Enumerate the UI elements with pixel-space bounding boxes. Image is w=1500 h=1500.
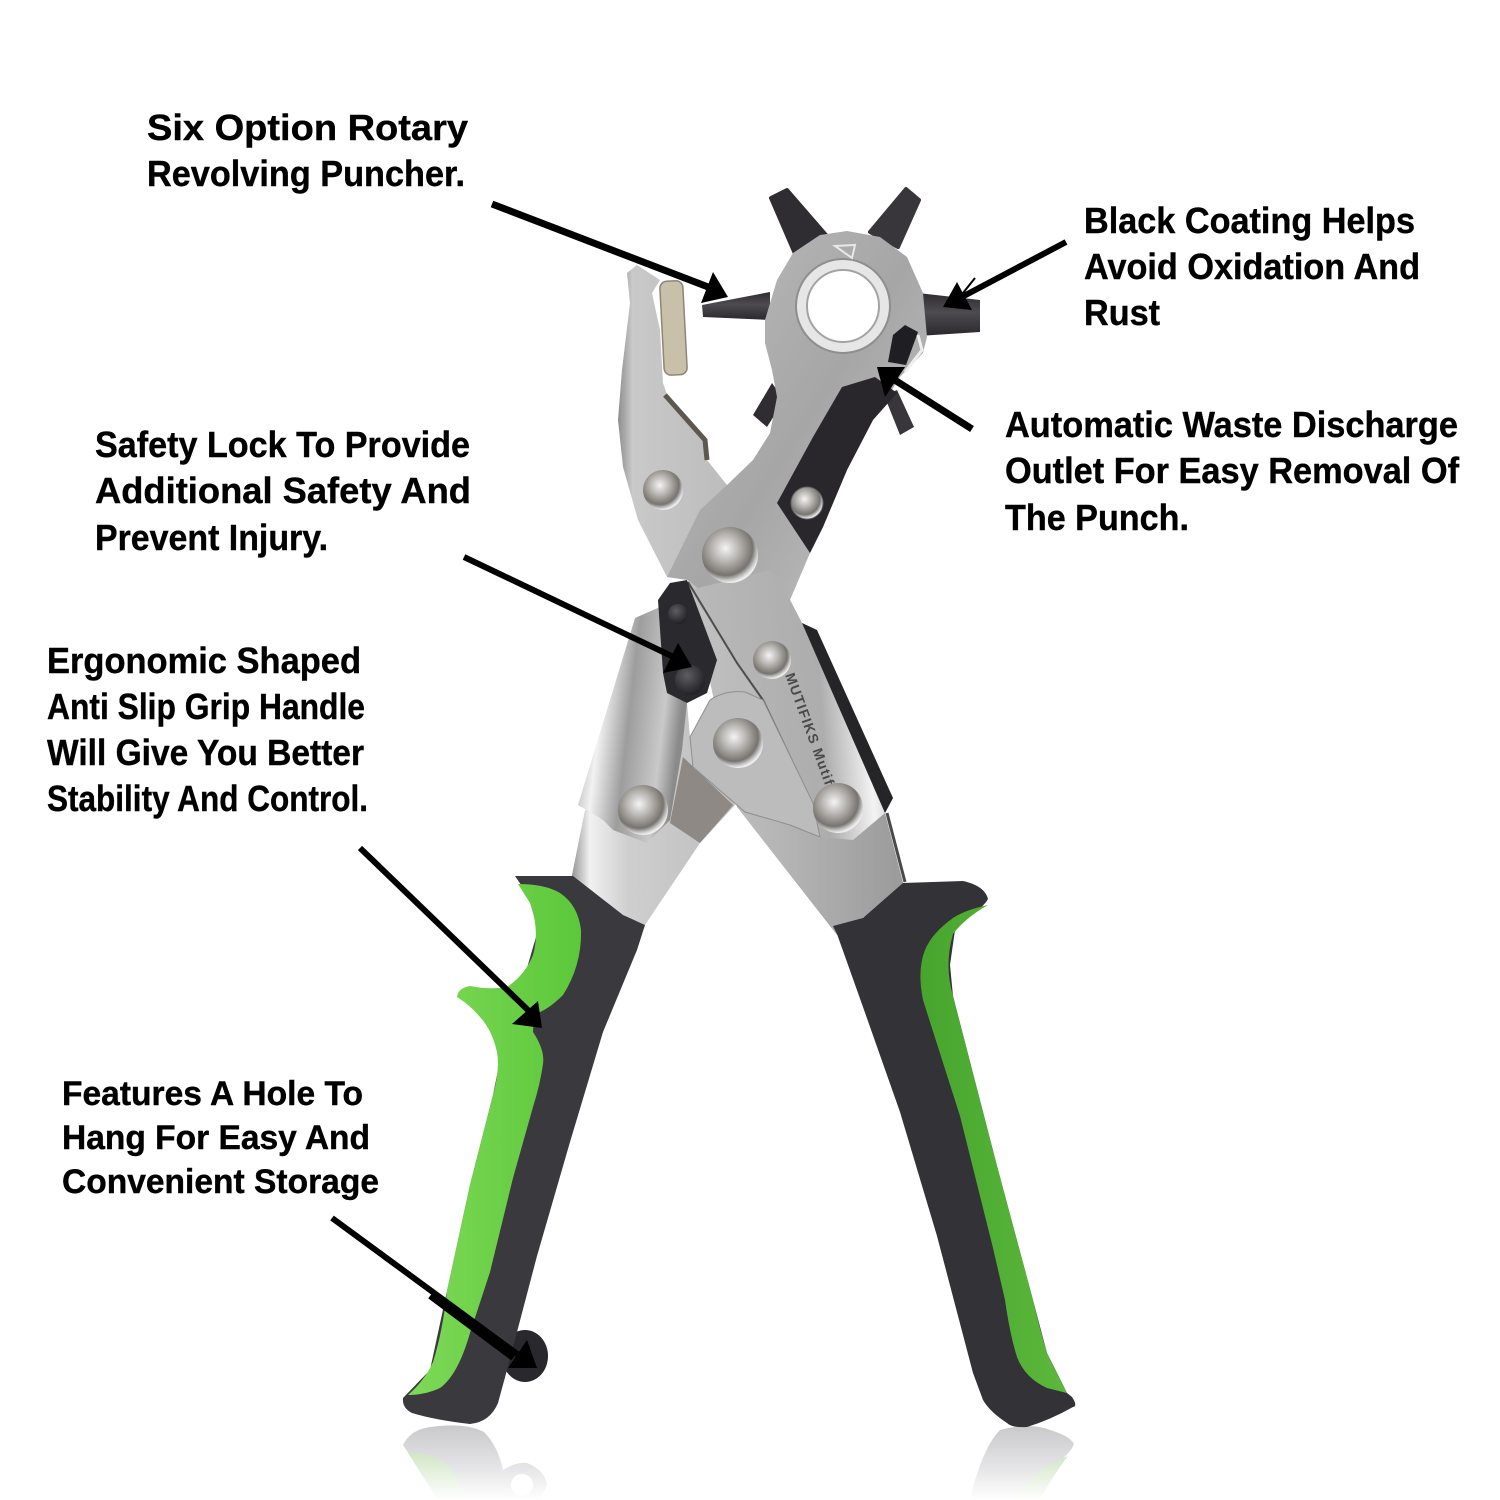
text: automatic waste discharge: Automatic Waste Discharge	[1005, 404, 1458, 445]
right handle green grip	[920, 905, 1067, 1393]
text: automatic waste discharge: Outlet For Easy Removal Of	[1005, 450, 1460, 491]
arrow: hanging hole	[332, 1218, 537, 1368]
tube: top left	[771, 190, 826, 256]
text: ergonomic grip	[47, 640, 368, 819]
dial index mark	[835, 245, 855, 258]
text: six option rotary: Revolving Puncher.	[147, 153, 465, 194]
text: ergonomic grip: Ergonomic Shaped	[47, 640, 361, 681]
handle reflections	[403, 1425, 1074, 1500]
rotary punch tubes	[702, 189, 980, 435]
text: black coating	[1084, 200, 1420, 333]
tube: right	[918, 293, 980, 336]
punch head eyelet	[796, 259, 890, 353]
text: ergonomic grip: Anti Slip Grip Handle	[47, 686, 365, 727]
text: safety lock: Safety Lock To Provide	[95, 424, 470, 465]
text: hanging hole: Convenient Storage	[62, 1163, 379, 1201]
text: safety lock: Prevent Injury.	[95, 517, 328, 558]
left handle	[403, 876, 645, 1424]
left handle green grip	[408, 884, 581, 1395]
arrow: black coating	[943, 242, 1066, 310]
crease line	[688, 582, 812, 803]
sleeve dark edge	[802, 623, 893, 813]
arrow: waste discharge	[877, 367, 972, 429]
rivet: centre plate	[713, 718, 763, 768]
rivet: main pivot	[702, 527, 758, 583]
arrow: rotary puncher	[492, 204, 728, 303]
text: ergonomic grip: Will Give You Better	[47, 732, 364, 773]
rotary head arm	[667, 231, 927, 640]
jaw inner dark edge	[665, 395, 707, 460]
text: black coating: Avoid Oxidation And	[1084, 246, 1420, 287]
arrow: safety lock	[464, 557, 692, 673]
arrow: grip handle	[360, 848, 542, 1028]
text: hanging hole: Features A Hole To	[62, 1075, 363, 1113]
rivet: sleeve small	[753, 641, 791, 679]
black side plate	[777, 377, 897, 553]
rivet: jaw upper	[643, 470, 683, 510]
lock rivet upper	[668, 604, 688, 624]
left sleeve	[578, 607, 687, 843]
left handle dark grip	[403, 876, 645, 1424]
lower left arm	[570, 703, 735, 925]
text: safety lock	[95, 424, 471, 558]
tube: bottom right	[884, 390, 914, 435]
tube: bottom left	[753, 383, 784, 427]
rivet: plate screw	[791, 487, 823, 519]
tube: left	[702, 292, 770, 320]
right handle	[833, 881, 1075, 1427]
rivet: lower left	[618, 785, 668, 835]
lock rivet lower	[675, 665, 705, 695]
text: six option rotary: Six Option Rotary	[147, 107, 468, 148]
text: black coating: Rust	[1084, 292, 1160, 333]
right handle dark grip	[833, 881, 1075, 1427]
jaw arm leading to right handle	[618, 265, 905, 935]
rivet: lower right	[813, 783, 863, 833]
hanging hole tab	[502, 1330, 548, 1382]
tube: top right	[870, 189, 919, 247]
waste discharge outlet	[888, 325, 918, 365]
brass anvil plate	[660, 280, 687, 376]
engraved brand text: MUTIFIKS Mutif	[782, 671, 838, 787]
text: six option rotary	[147, 107, 468, 194]
centre lobed plate	[690, 692, 820, 837]
safety lock	[658, 580, 717, 703]
dark shaded wedge	[670, 757, 733, 843]
text: ergonomic grip: Stability And Control.	[47, 778, 368, 819]
text: hanging hole	[62, 1075, 379, 1201]
arm outer dark edge	[887, 813, 905, 882]
right arm lower plate with sleeve	[688, 570, 905, 882]
text: hanging hole: Hang For Easy And	[62, 1119, 370, 1157]
text: black coating: Black Coating Helps	[1084, 200, 1415, 241]
text: automatic waste discharge	[1005, 404, 1460, 538]
text: safety lock: Additional Safety And	[95, 470, 471, 511]
text: automatic waste discharge: The Punch.	[1005, 497, 1189, 538]
